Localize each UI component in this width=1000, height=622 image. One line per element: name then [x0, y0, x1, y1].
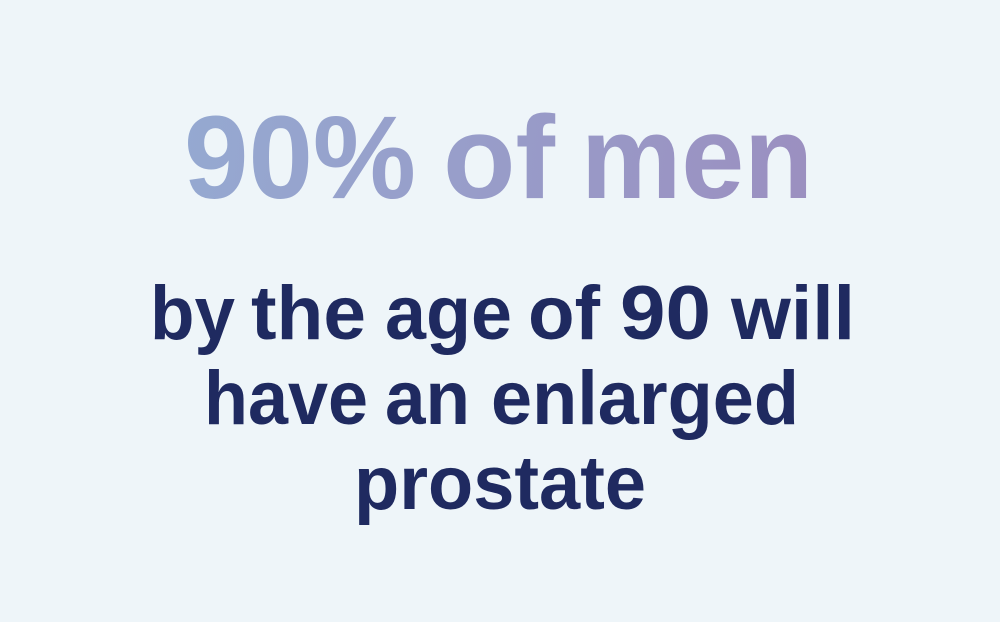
line 1 [150, 271, 855, 356]
title: 90% of men [184, 92, 813, 224]
title: 90% of men: men [581, 92, 813, 224]
line 2: have [204, 356, 368, 441]
title: 90% of men: 90% [184, 92, 416, 224]
line 2: an [385, 356, 470, 441]
text block: description [150, 271, 855, 526]
line 1: will [730, 271, 855, 356]
line 2 [204, 356, 799, 441]
line 1: of [528, 271, 601, 356]
line 2: enlarged [491, 356, 799, 441]
line 1: the [251, 271, 366, 356]
line 1: age [385, 271, 512, 356]
title: 90% of men: of [443, 92, 556, 224]
line 3: prostate [354, 441, 646, 526]
line 1: 90 [620, 271, 711, 356]
line 1: by [150, 271, 235, 356]
